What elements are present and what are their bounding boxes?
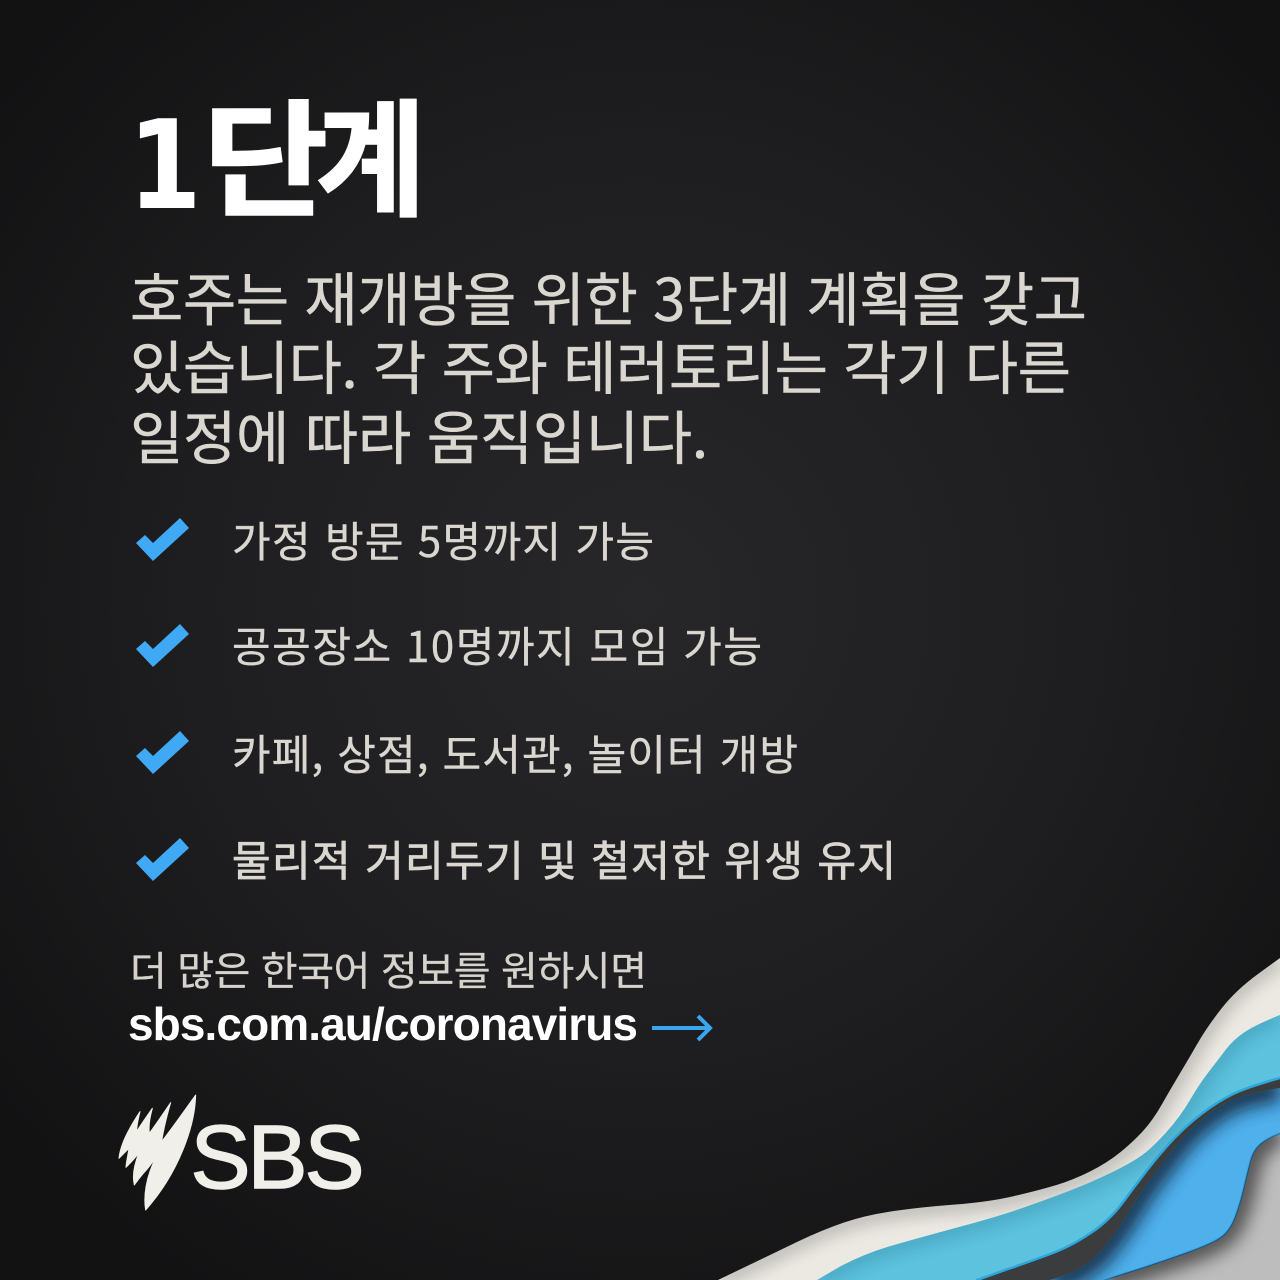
wave: charcoal layer (977, 1074, 1280, 1280)
title: 계 (316, 61, 426, 243)
logo mark (119, 1095, 196, 1210)
item 3: venues reopen: 카페, 상점, 도서관, 놀이터 개방 (232, 722, 798, 783)
wave: cream layer (718, 958, 1280, 1280)
wave: grey layer (1103, 1128, 1280, 1280)
layered wave decoration (718, 958, 1280, 1280)
SBS logo (119, 1095, 364, 1210)
intro paragraph (130, 254, 1087, 476)
logo wordmark: SBS (190, 1108, 364, 1208)
arrow (652, 1016, 710, 1040)
item 2: public gatherings: 공공장소 10명까지 모임 가능 (232, 614, 762, 675)
intro paragraph: 있습니다. 각 주와 테러토리는 각기 다른 (130, 322, 1071, 406)
title (128, 59, 426, 243)
item 1: home visits: 가정 방문 5명까지 가능 (232, 509, 654, 570)
intro paragraph: 일정에 따라 움직입니다. (130, 392, 708, 476)
wave: blue layer (1050, 1088, 1280, 1280)
checklist (136, 509, 896, 889)
intro paragraph: 호주는 재개방을 위한 3단계 계획을 갖고 (130, 254, 1087, 338)
item 4: distancing and hygiene: 물리적 거리두기 및 철저한 위생 유지 (232, 828, 896, 889)
title: 1 (128, 95, 202, 238)
website link: sbs.com.au/coronavirus (128, 998, 638, 1050)
wave: teal layer (817, 1015, 1280, 1280)
title: 단 (203, 59, 328, 242)
more information text: 더 많은 한국어 정보를 원하시면 (130, 939, 647, 997)
